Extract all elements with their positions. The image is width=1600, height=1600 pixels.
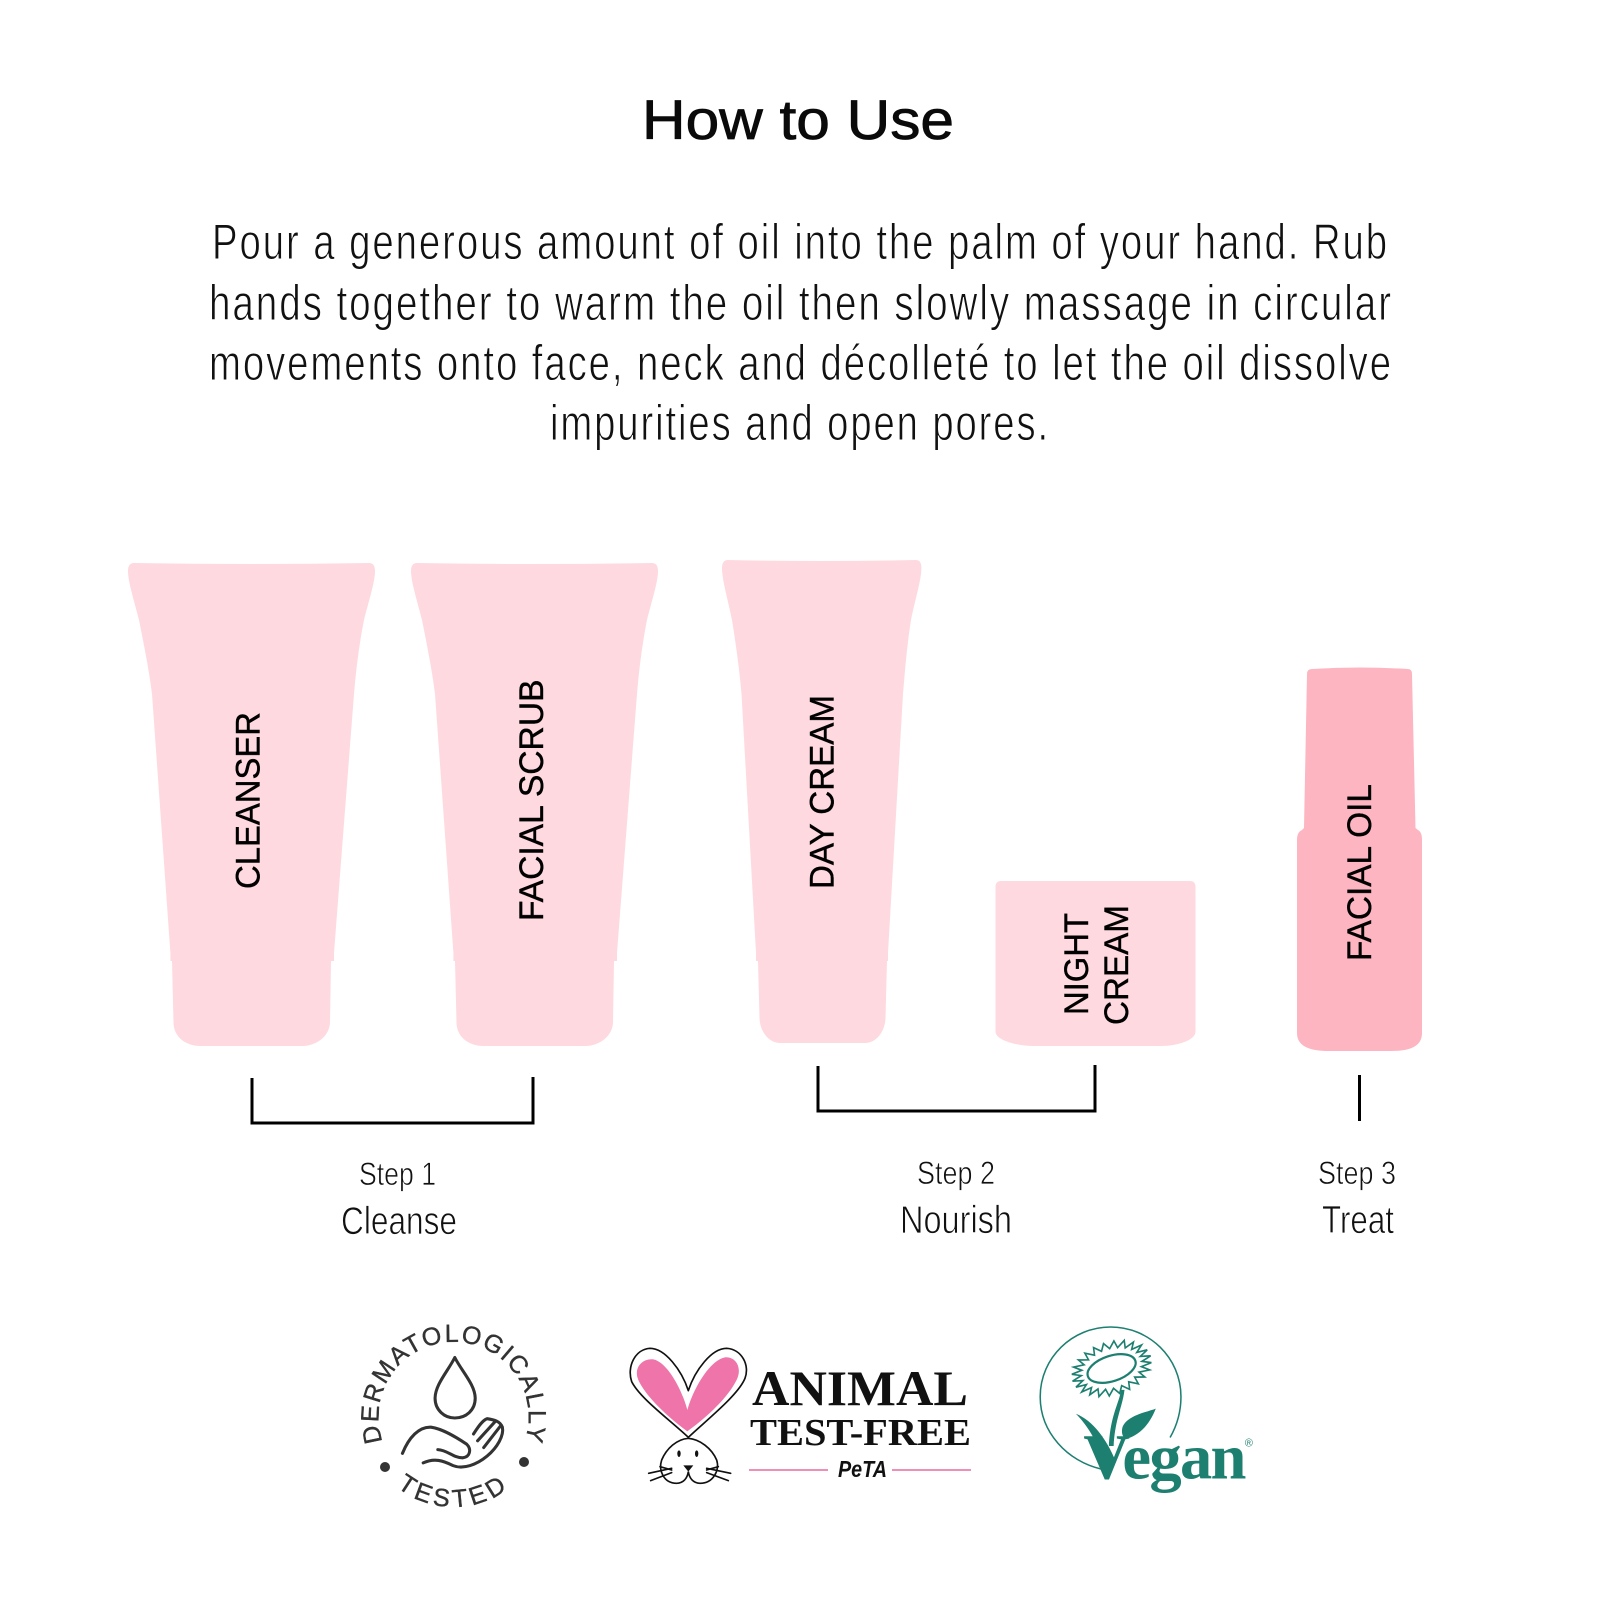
- product: cleanser tube: CLEANSER: [230, 712, 268, 889]
- step 3 label: Step 3: [1318, 1155, 1396, 1191]
- product: facial scrub tube: FACIAL SCRUB: [513, 680, 551, 921]
- badge: dermatologically tested: TESTED: [402, 1472, 504, 1508]
- instructions text block: [209, 214, 1393, 451]
- badge: vegan sunflower: ®: [1245, 1438, 1253, 1450]
- bracket: step 1: [252, 1077, 533, 1123]
- badge: animal test-free peta: [630, 1348, 971, 1483]
- product: night cream jar: [996, 881, 1196, 1046]
- badge: vegan sunflower: Vegan: [1083, 1420, 1246, 1492]
- step 2 label: Step 2: [917, 1155, 995, 1191]
- badge: vegan sunflower: [1040, 1327, 1253, 1492]
- bracket: step 2: [818, 1065, 1095, 1111]
- product: day cream tube: [722, 560, 921, 1043]
- badge: animal test-free peta: PeTA: [838, 1456, 887, 1482]
- step 3 label: [1318, 1155, 1396, 1242]
- badge: animal test-free peta: TEST-FREE: [750, 1412, 971, 1454]
- step 1 label: Step 1: [359, 1156, 436, 1192]
- product: facial scrub tube: [411, 563, 658, 1046]
- title: How to Use: [642, 88, 954, 151]
- step 2 label: Nourish: [900, 1199, 1012, 1242]
- step 3 label: Treat: [1322, 1199, 1394, 1242]
- badge: animal test-free peta: ANIMAL: [752, 1360, 968, 1416]
- icon: bunny with heart ears: [630, 1348, 746, 1483]
- product: night cream jar: NIGHT: [1058, 913, 1096, 1015]
- step 1 label: Cleanse: [341, 1200, 457, 1243]
- instructions text block: impurities and open pores.: [550, 395, 1050, 451]
- badge: dermatologically tested: [361, 1324, 546, 1508]
- product: facial oil bottle: [1297, 668, 1422, 1051]
- product: cleanser tube: [128, 563, 375, 1046]
- product: facial oil bottle: FACIAL OIL: [1341, 784, 1379, 961]
- step 1 label: [341, 1156, 457, 1243]
- bracket: step 3 tick: [1358, 1075, 1361, 1121]
- step 2 label: [900, 1155, 1012, 1242]
- product: day cream tube: DAY CREAM: [804, 695, 842, 889]
- badge: dermatologically tested: DERMATOLOGICALLY: [361, 1324, 546, 1444]
- product: night cream jar: CREAM: [1098, 905, 1136, 1025]
